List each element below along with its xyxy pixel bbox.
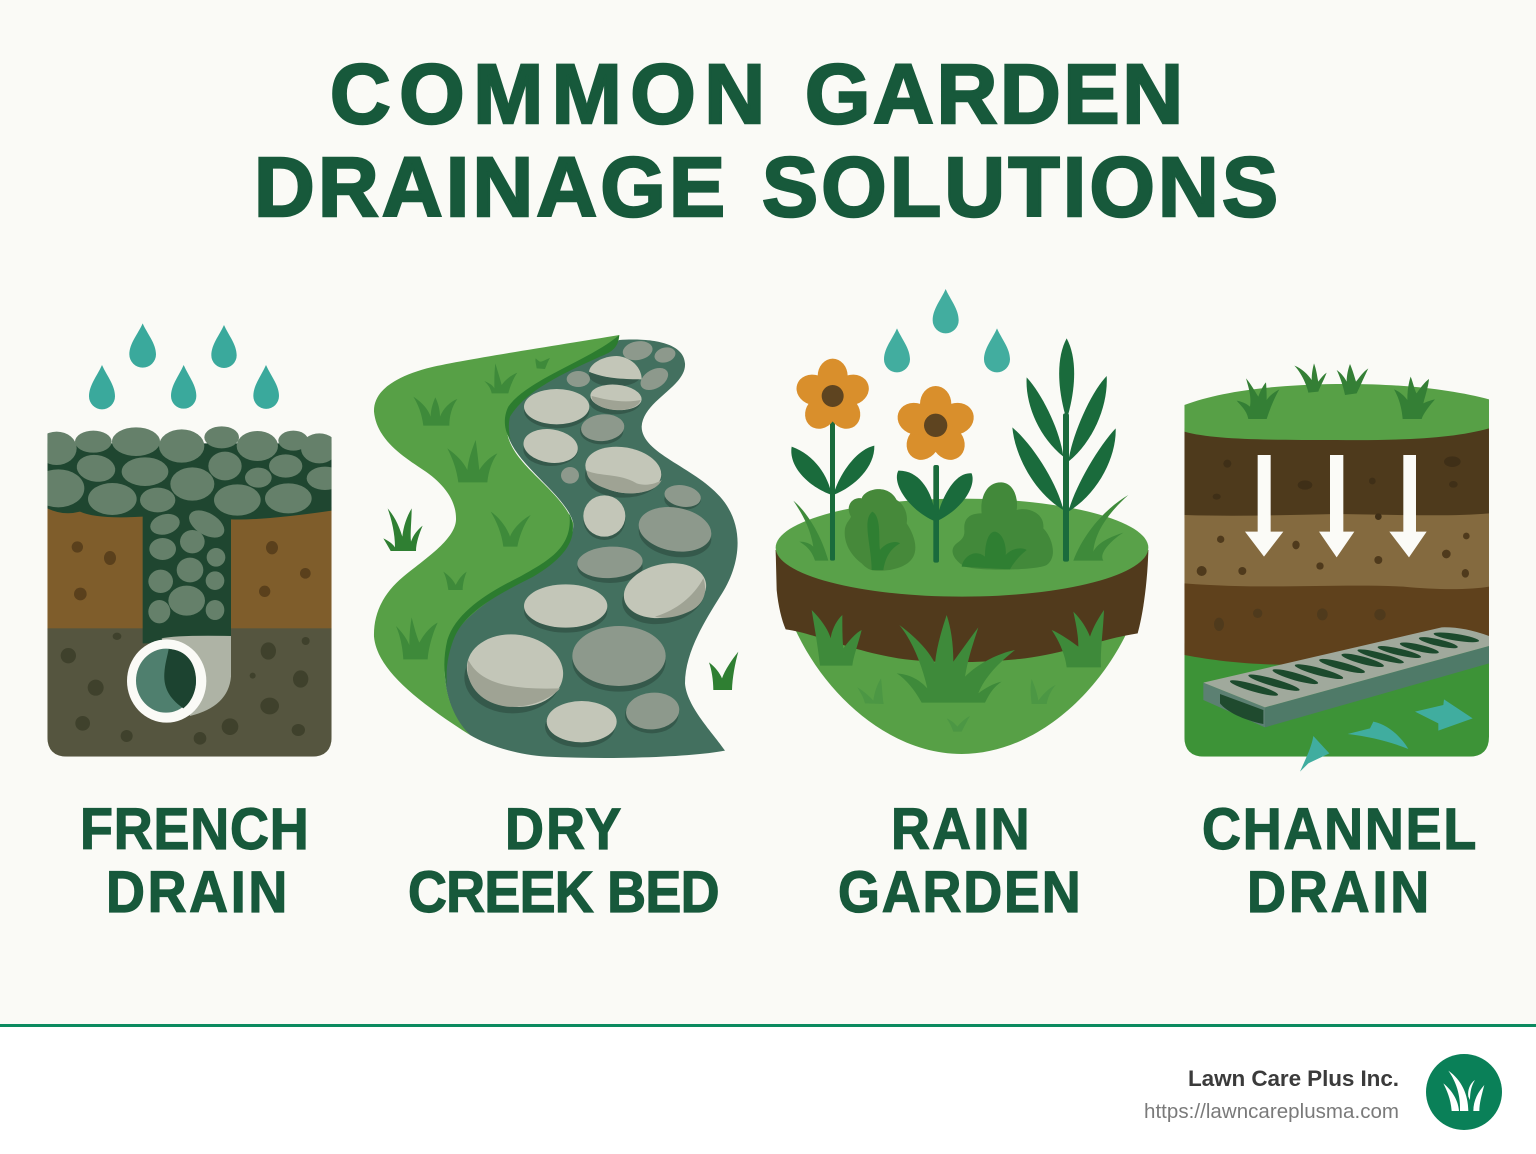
bowl bbox=[776, 550, 1148, 754]
rain drops bbox=[884, 289, 1010, 372]
label: Rain garden: RAIN bbox=[891, 796, 1030, 861]
icon: drain pipe bbox=[127, 636, 231, 723]
icon: logo bbox=[1426, 1054, 1502, 1130]
soil layers bbox=[1184, 384, 1489, 758]
label: Dry creek bed: DRY bbox=[505, 796, 621, 861]
label: Dry creek bed: CREEK BED bbox=[408, 859, 720, 924]
title bbox=[254, 47, 1278, 234]
label: Dry creek bed bbox=[408, 796, 720, 924]
plants bbox=[791, 338, 1116, 563]
creek bbox=[445, 340, 738, 758]
label: Rain garden bbox=[838, 796, 1081, 924]
icon: rain drops bbox=[89, 323, 279, 409]
side grass bbox=[793, 495, 1128, 561]
grass tufts bbox=[1237, 363, 1435, 419]
icon: channel grate bbox=[1203, 627, 1489, 727]
company name: Lawn Care Plus Inc. bbox=[1188, 1066, 1399, 1091]
arrows: water flowing down bbox=[1245, 455, 1427, 557]
gray stones bbox=[561, 339, 715, 732]
title: DRAINAGE bbox=[254, 140, 725, 234]
label: Rain garden: GARDEN bbox=[838, 859, 1081, 924]
label: Channel drain: DRAIN bbox=[1247, 859, 1429, 924]
soil layers bbox=[32, 426, 343, 758]
flowers bbox=[793, 359, 978, 466]
soil speckles bbox=[1213, 456, 1461, 520]
label: French drain bbox=[80, 796, 309, 924]
panel: rain garden bbox=[776, 289, 1148, 754]
stone shading bbox=[467, 396, 705, 707]
stone shadows bbox=[464, 363, 715, 747]
panel: dry creek bed bbox=[374, 335, 738, 758]
label: French drain: FRENCH bbox=[80, 796, 309, 861]
soil speckles bbox=[61, 633, 310, 745]
website: https://lawncareplusma.com bbox=[1144, 1100, 1399, 1123]
panel: channel drain bbox=[1184, 363, 1489, 772]
flow arrows bbox=[1300, 699, 1473, 772]
title: SOLUTIONS bbox=[762, 140, 1278, 234]
light stones bbox=[462, 356, 711, 742]
labels bbox=[80, 796, 1476, 924]
grass tufts bbox=[396, 358, 550, 659]
shrubs bbox=[845, 482, 1053, 571]
label: French drain: DRAIN bbox=[106, 859, 287, 924]
lower grass tufts bbox=[812, 610, 1104, 732]
bank edge bbox=[444, 335, 619, 687]
outside tufts bbox=[383, 508, 738, 690]
footer bbox=[0, 1024, 1536, 1154]
panel: French drain bbox=[32, 323, 343, 758]
title: GARDEN bbox=[805, 47, 1183, 141]
grass bank bbox=[374, 335, 619, 735]
title: COMMON bbox=[330, 47, 765, 141]
label: Channel drain bbox=[1202, 796, 1476, 924]
label: Channel drain: CHANNEL bbox=[1202, 796, 1476, 861]
gravel stones bbox=[32, 426, 343, 623]
